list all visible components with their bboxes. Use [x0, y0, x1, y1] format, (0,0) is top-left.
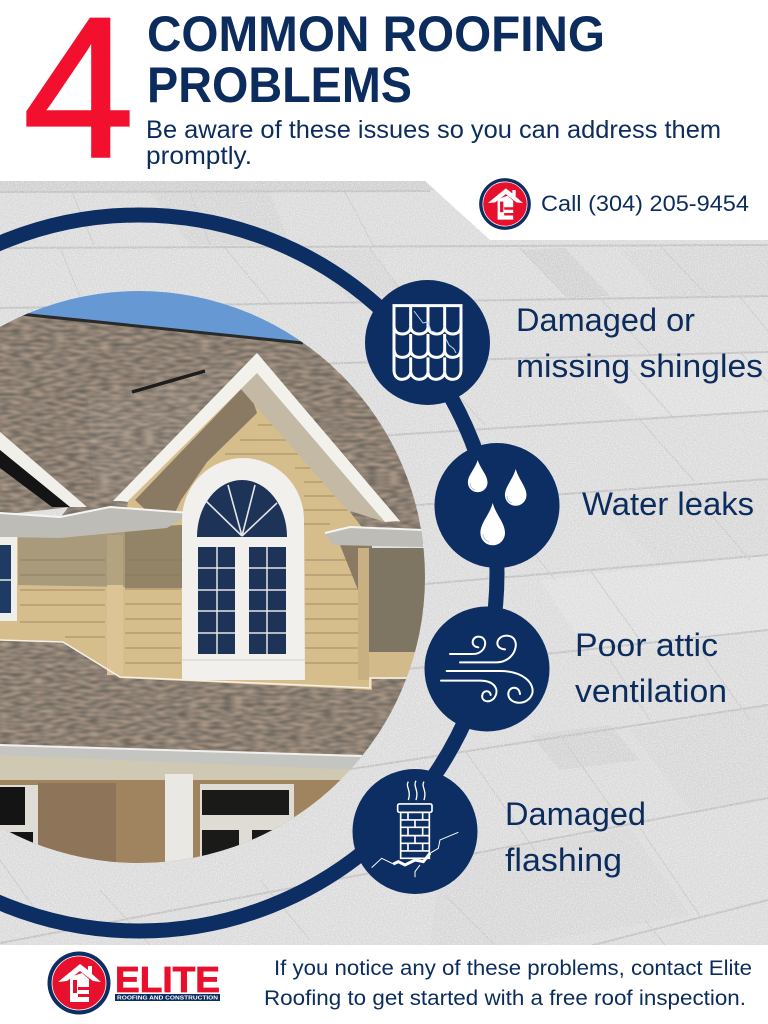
sky	[0, 291, 320, 355]
left gable trim and shadow	[0, 432, 87, 507]
main wall siding	[0, 376, 429, 690]
icon: cracked chimney circle	[352, 769, 478, 894]
upper roof	[0, 314, 423, 756]
step 4 label: flashing	[505, 842, 622, 878]
subtitle	[146, 116, 721, 170]
phone call-out with logo icon: Call (304) 205-9454	[541, 191, 749, 216]
house photo circle	[0, 285, 450, 870]
shingle roof background	[0, 181, 768, 1000]
left window	[0, 537, 17, 621]
footer message: Roofing to get started with a free roof inspection.	[264, 987, 746, 1010]
lower gutter and soffit	[0, 755, 360, 782]
arched window	[182, 458, 305, 680]
icon: water drops circle	[434, 443, 560, 568]
footer logo	[48, 952, 220, 1014]
right gutter	[325, 527, 423, 547]
footer message	[264, 957, 752, 1010]
title	[147, 6, 605, 113]
step 1 label	[516, 302, 763, 384]
main gable white trim	[113, 353, 400, 522]
timeline ring	[0, 215, 497, 931]
wall flashing trim	[0, 640, 410, 688]
footer logo: ROOFING AND CONSTRUCTION	[117, 996, 218, 1002]
step 4 label: Damaged	[505, 796, 646, 832]
subtitle: Be aware of these issues so you can address them	[146, 116, 721, 144]
phone call-out with logo icon	[479, 178, 749, 230]
roof ridge	[20, 314, 303, 343]
icon: damaged shingles circle	[365, 280, 490, 405]
footer logo: ELITE	[115, 959, 220, 1000]
title: PROBLEMS	[147, 57, 412, 113]
title: COMMON ROOFING	[147, 6, 605, 62]
step 3 label	[575, 627, 727, 709]
icon: small logo	[479, 178, 531, 230]
step 4 label	[505, 796, 646, 878]
step 2 label: Water leaks	[582, 486, 754, 522]
step 1 label: missing shingles	[516, 348, 763, 384]
step 1 label: Damaged or	[516, 302, 695, 338]
footer message: If you notice any of these problems, contact Elite	[274, 957, 752, 980]
porch brick	[0, 774, 340, 863]
gable soffit	[240, 372, 385, 522]
subtitle: promptly.	[146, 142, 252, 170]
step 3 label: ventilation	[575, 673, 727, 709]
icon: logo mark	[48, 952, 110, 1014]
roof hip highlight	[88, 362, 245, 505]
left gutter	[0, 507, 190, 538]
step 3 label: Poor attic	[575, 627, 718, 663]
icon: wind circle	[424, 606, 550, 732]
